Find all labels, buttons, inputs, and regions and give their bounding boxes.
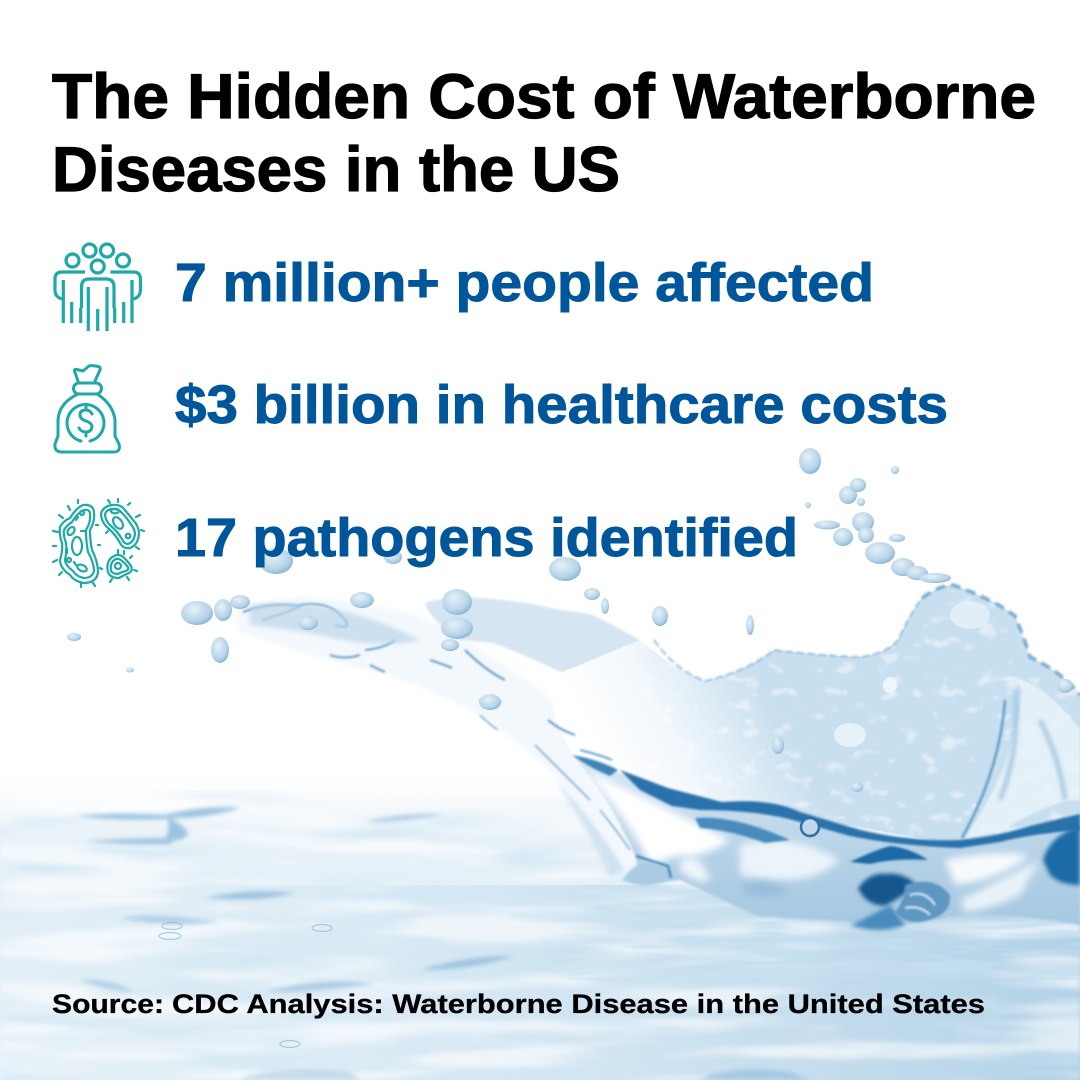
stat: pathogens [53,499,798,587]
source note: Source: [52,989,164,1019]
dark rim band [620,770,1080,848]
title [52,62,1036,205]
icon: money bag [55,366,119,452]
stat: people affected [55,244,874,331]
surface streaks [76,807,810,1080]
stat text: 7 million+ people affected [175,253,874,313]
source note: CDC Analysis: Waterborne Disease in the United States [172,989,985,1019]
rock-like drop [622,862,672,885]
dark streaks in spray wing [243,604,630,850]
splash droplets [67,448,1073,792]
water splash [67,448,1080,930]
title: The Hidden Cost of Waterborne [52,62,1036,132]
stat text: 17 pathogens identified [175,508,798,568]
lower water mass [574,757,1080,925]
deep blue folds [850,846,928,864]
title: Diseases in the US [52,135,620,205]
floating rings [159,922,332,1048]
stat: healthcare costs [55,366,948,452]
spray wing, left [237,597,640,880]
icon: pathogens [53,499,144,587]
water surface [0,765,1080,1080]
right curtain [965,677,1080,838]
main sheet [553,585,1080,845]
stat text: $3 billion in healthcare costs [175,375,948,435]
icon: group of people [55,244,140,331]
white highlights [585,770,730,865]
